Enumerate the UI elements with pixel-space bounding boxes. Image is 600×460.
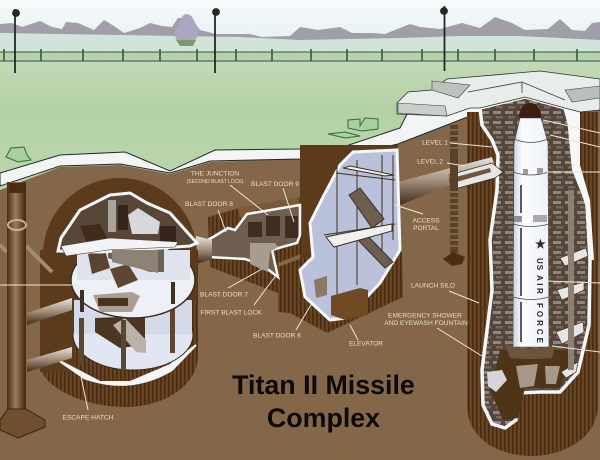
label: emergency shower and eyewash fountain: EMERGENCY SHOWER bbox=[388, 312, 462, 320]
fence mesh bbox=[0, 52, 600, 62]
missile lettering bbox=[535, 258, 544, 346]
left vertical shaft bbox=[0, 182, 72, 438]
upper room furnishings bbox=[80, 200, 176, 246]
label: escape hatch: ESCAPE HATCH bbox=[63, 414, 114, 422]
lamp posts bbox=[13, 6, 447, 73]
far field bbox=[0, 33, 600, 60]
column base bbox=[0, 409, 45, 438]
blast door 6 bbox=[314, 276, 327, 298]
tunnel cutaway bbox=[208, 205, 300, 277]
elevator cab bbox=[331, 288, 368, 320]
label: second blast lock: (SECOND BLAST LOCK) bbox=[187, 179, 244, 185]
label: the junction: THE JUNCTION bbox=[191, 170, 239, 178]
panel: blast lock tunnels bbox=[196, 197, 303, 293]
dome bbox=[43, 178, 197, 300]
label: blast door 6: BLAST DOOR 6 bbox=[253, 332, 301, 340]
grass field bbox=[0, 62, 600, 190]
column collar bbox=[9, 183, 25, 193]
labels and leader lines bbox=[0, 120, 600, 422]
stairs and landings bbox=[324, 155, 395, 300]
nose tip bbox=[519, 103, 541, 118]
label: level 1: LEVEL 1 bbox=[422, 140, 448, 146]
left dark wall bbox=[40, 250, 75, 372]
label: blast door 7: BLAST DOOR 7 bbox=[200, 292, 248, 298]
label: blast door 8: BLAST DOOR 8 bbox=[185, 201, 233, 208]
engine bay bbox=[490, 350, 575, 420]
missile lettering: US bbox=[535, 258, 544, 271]
sky bbox=[0, 0, 600, 38]
label: elevator: ELEVATOR bbox=[349, 340, 383, 348]
escape shaft column bbox=[7, 182, 26, 414]
tunnel upper lid bbox=[237, 197, 300, 222]
shaft base bbox=[278, 250, 403, 333]
shaft tower wall bbox=[300, 145, 398, 260]
silo cutaway interior bbox=[480, 97, 590, 428]
silo closure door bbox=[397, 71, 600, 116]
ladder base bbox=[443, 252, 465, 266]
label: level 2: LEVEL 2 bbox=[417, 158, 443, 166]
distant tree line bbox=[0, 17, 600, 40]
panel: launch control center bbox=[40, 178, 198, 407]
blast door room bbox=[250, 243, 278, 272]
tunnel block bbox=[208, 197, 303, 293]
silo outer wall bbox=[467, 112, 598, 456]
panel: elevator shaft bbox=[278, 145, 403, 333]
work platforms bbox=[556, 248, 588, 378]
shaft cutaway bbox=[300, 150, 400, 320]
label: blast door 9: BLAST DOOR 9 bbox=[251, 181, 299, 188]
label: access portal: ACCESS bbox=[412, 218, 440, 224]
missile body bbox=[513, 118, 549, 347]
column ring bbox=[8, 220, 26, 230]
concrete surface band bbox=[0, 105, 490, 186]
title: Titan II Missile bbox=[232, 370, 415, 400]
label: first blast lock: FIRST BLAST LOCK bbox=[200, 310, 262, 316]
missile lettering: FORCE bbox=[535, 303, 544, 346]
connecting catwalk bbox=[449, 163, 503, 190]
main floor bbox=[71, 242, 195, 318]
ladder column bbox=[450, 125, 458, 253]
silo wall white service tube bbox=[566, 108, 594, 260]
earth texture bbox=[0, 190, 600, 460]
leader lines bbox=[0, 120, 600, 410]
lower cylinder bbox=[40, 250, 198, 407]
access portal tube bbox=[398, 157, 495, 205]
air force star insignia: ★ bbox=[535, 237, 546, 251]
label: emergency shower and eyewash fountain: AND EYEWASH FOUNTAIN bbox=[384, 320, 468, 327]
small surface structures bbox=[6, 118, 378, 162]
missile bbox=[513, 103, 549, 347]
tree bbox=[175, 14, 198, 46]
shaft pipes to control center bbox=[0, 245, 72, 372]
connector bbox=[196, 236, 212, 264]
underground earth bbox=[0, 100, 600, 460]
fence bbox=[0, 49, 600, 61]
title: Complex bbox=[267, 403, 380, 433]
equipment bank bbox=[112, 250, 158, 273]
label: access portal: PORTAL bbox=[413, 225, 439, 232]
upper room bbox=[58, 193, 197, 252]
missile thrust ring bbox=[505, 344, 556, 359]
label: launch silo: LAUNCH SILO bbox=[411, 282, 455, 290]
platform column bbox=[568, 190, 574, 370]
floor deck bbox=[61, 238, 178, 256]
missile lettering: AIR bbox=[535, 275, 544, 296]
lower floor bbox=[58, 300, 196, 385]
level tunnel bbox=[398, 125, 503, 266]
panel: launch silo bbox=[467, 97, 598, 456]
